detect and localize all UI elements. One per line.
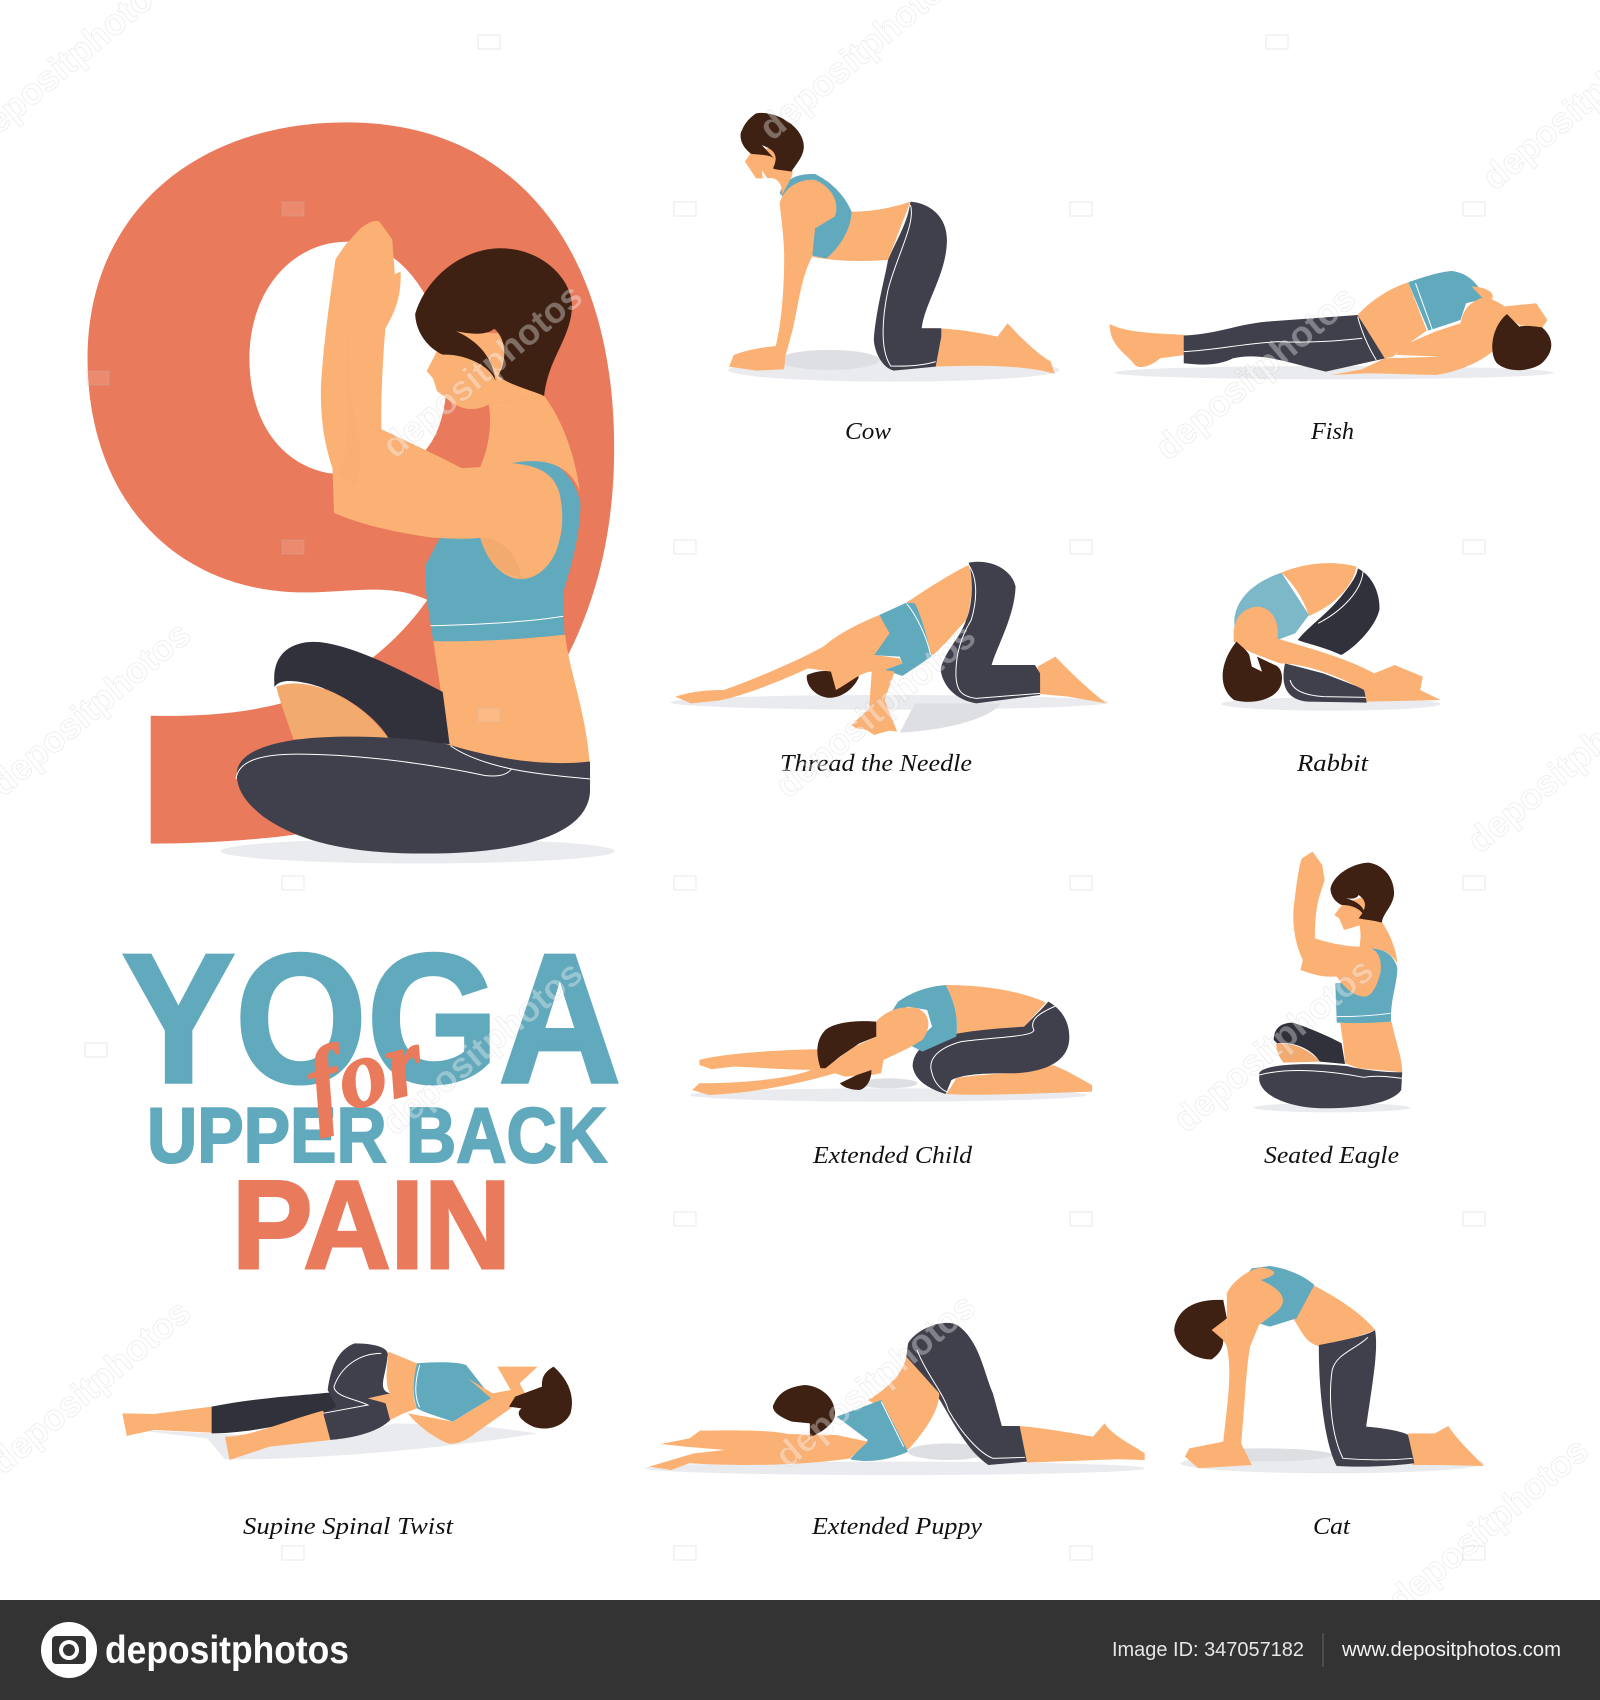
faint watermark camera marks bbox=[85, 35, 1485, 1560]
heading: PAIN: PAIN bbox=[232, 1156, 511, 1295]
figure: Extended Child bbox=[690, 985, 1092, 1102]
faint watermark text: depositphotos bbox=[1147, 277, 1363, 468]
heading: for: for bbox=[295, 1006, 435, 1139]
pose: Supine Spinal Twist bbox=[122, 1343, 572, 1540]
figure: Cat bbox=[1174, 1266, 1484, 1473]
floor shadow bbox=[221, 839, 615, 864]
title bbox=[122, 915, 621, 1295]
heading: YOGA: YOGA bbox=[122, 915, 621, 1121]
seated eagle figure, large bbox=[236, 221, 590, 854]
image id: Image ID: 347057182 bbox=[1112, 1639, 1304, 1661]
heading: UPPER BACK: UPPER BACK bbox=[147, 1091, 607, 1179]
footer bar bbox=[0, 1600, 1600, 1700]
label: Rabbit: Rabbit bbox=[1296, 751, 1369, 777]
website: www.depositphotos.com bbox=[1341, 1639, 1561, 1661]
logo wordmark: depositphotos bbox=[105, 1629, 349, 1672]
faint watermark text: depositphotos bbox=[1165, 949, 1381, 1140]
pose: Extended Child bbox=[690, 985, 1092, 1169]
numeral 9 bbox=[88, 122, 614, 844]
figure: Extended Puppy bbox=[645, 1323, 1145, 1475]
figure: Supine Spinal Twist bbox=[122, 1343, 572, 1460]
pose: Extended Puppy bbox=[645, 1323, 1145, 1540]
figure: Thread the Needle bbox=[670, 562, 1109, 735]
faint watermark text: depositphotos bbox=[374, 275, 590, 466]
label: Extended Child: Extended Child bbox=[812, 1143, 973, 1169]
label: Cat: Cat bbox=[1313, 1514, 1351, 1540]
big number nine with seated figure bbox=[88, 122, 615, 864]
faint watermark text: depositphotos bbox=[767, 615, 983, 806]
label: Seated Eagle: Seated Eagle bbox=[1264, 1143, 1399, 1169]
figure: Seated Eagle bbox=[1253, 852, 1410, 1112]
pose: Fish bbox=[1110, 271, 1554, 445]
faint watermark text: depositphotos bbox=[374, 952, 590, 1143]
pose: Seated Eagle bbox=[1253, 852, 1410, 1169]
figure: Rabbit bbox=[1221, 563, 1441, 711]
label: Extended Puppy: Extended Puppy bbox=[811, 1514, 982, 1540]
faint watermark text: depositphotos bbox=[1380, 1429, 1596, 1620]
faint watermark text: depositphotos bbox=[767, 1285, 983, 1476]
figure: Fish bbox=[1110, 271, 1554, 379]
label: Supine Spinal Twist: Supine Spinal Twist bbox=[243, 1514, 454, 1540]
icon: camera logo bbox=[41, 1622, 97, 1678]
pose: Rabbit bbox=[1221, 563, 1441, 777]
label: Cow: Cow bbox=[845, 419, 891, 445]
pose: Cow bbox=[728, 113, 1059, 445]
label: Thread the Needle: Thread the Needle bbox=[780, 751, 972, 777]
figure: Cow bbox=[728, 113, 1059, 382]
pose: Cat bbox=[1174, 1266, 1484, 1540]
pose: Thread the Needle bbox=[670, 562, 1109, 777]
label: Fish: Fish bbox=[1310, 419, 1354, 445]
